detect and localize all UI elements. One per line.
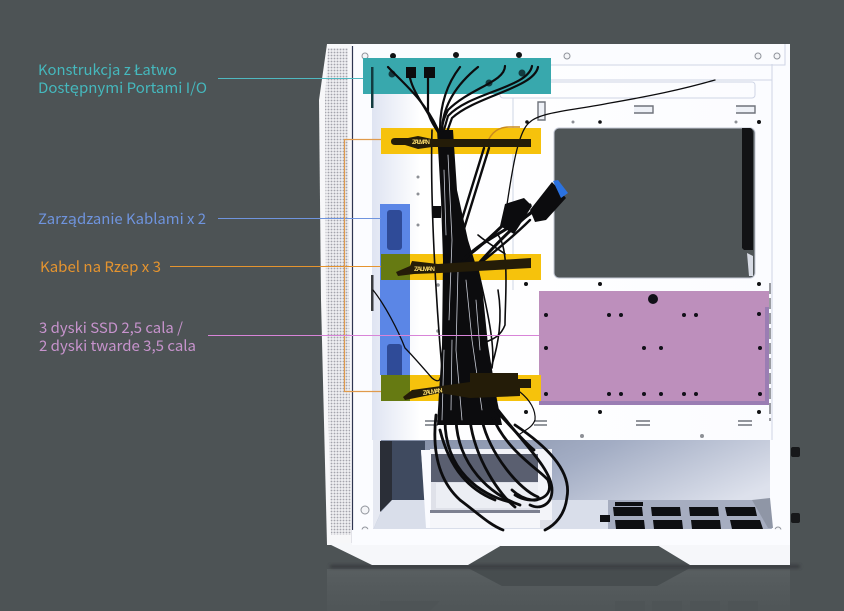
velcro strap top: ZALMAN (412, 139, 430, 146)
velcro strap top (391, 136, 531, 149)
connectors (406, 67, 566, 234)
label: I/O ports: Konstrukcja z Łatwo (38, 59, 177, 80)
fan strip (742, 128, 753, 250)
flat pair (458, 148, 484, 232)
leader line: cable management (218, 218, 381, 220)
highlight: blue cable channel (380, 204, 410, 384)
front panel frame (319, 44, 353, 545)
case feet (327, 543, 790, 565)
main plate (372, 64, 772, 440)
dense bundle core (437, 130, 502, 425)
drive cage (421, 449, 552, 528)
bottom band (352, 529, 790, 545)
velcro strap middle: ZALMAN (414, 266, 435, 273)
icon: case screws (361, 53, 781, 533)
teal zone details (371, 67, 526, 108)
side tabs (769, 283, 771, 421)
velcro strap bottom: ZALMAN (422, 387, 443, 397)
icon: rear thumbscrews (791, 447, 800, 523)
velcro strap bottom (403, 373, 531, 400)
bay vents (600, 502, 763, 529)
window opening (554, 128, 755, 278)
thin cable on left (373, 290, 440, 381)
front edge (352, 46, 354, 543)
plate slots (425, 102, 755, 425)
I/O cables (388, 66, 538, 135)
right branch cables (462, 210, 535, 262)
thin bundle cables (432, 130, 506, 370)
label: cable management: Zarządzanie Kablami x 2 (38, 208, 206, 229)
front mesh panel (325, 48, 351, 535)
label: velcro cable: Kabel na Rzep x 3 (40, 256, 161, 277)
side latch bars (371, 275, 374, 311)
orange wire on strap (486, 127, 520, 145)
case (319, 44, 800, 565)
label: I/O ports: Dostępnymi Portami I/O (38, 77, 207, 98)
vent floor (608, 500, 772, 530)
cable bundle (373, 66, 715, 530)
leader line: I/O (218, 78, 363, 80)
case body (352, 44, 790, 546)
label: drives: 2 dyski twarde 3,5 cala (39, 335, 196, 356)
lower cable loops (435, 400, 568, 530)
top rail (372, 44, 785, 440)
highlight: pink drive mount (539, 291, 769, 405)
label: drives: 3 dyski SSD 2,5 cala / (39, 317, 183, 338)
plate holes (390, 52, 761, 414)
velcro strap middle (396, 258, 531, 276)
leader line: velcro (170, 266, 381, 268)
lower bay (373, 440, 773, 530)
icon: blue USB connector (553, 180, 568, 198)
thin cable to top (505, 80, 715, 218)
highlight: teal I/O ports (363, 58, 551, 94)
highlight: olive overlaps (381, 254, 410, 401)
highlight: yellow velcro strap zones (381, 128, 541, 401)
cable bottom right (520, 392, 535, 434)
bracket: velcro (344, 140, 381, 392)
leader line: drives (208, 334, 539, 336)
floor reflection (327, 565, 800, 611)
gaps between cables (442, 155, 482, 420)
